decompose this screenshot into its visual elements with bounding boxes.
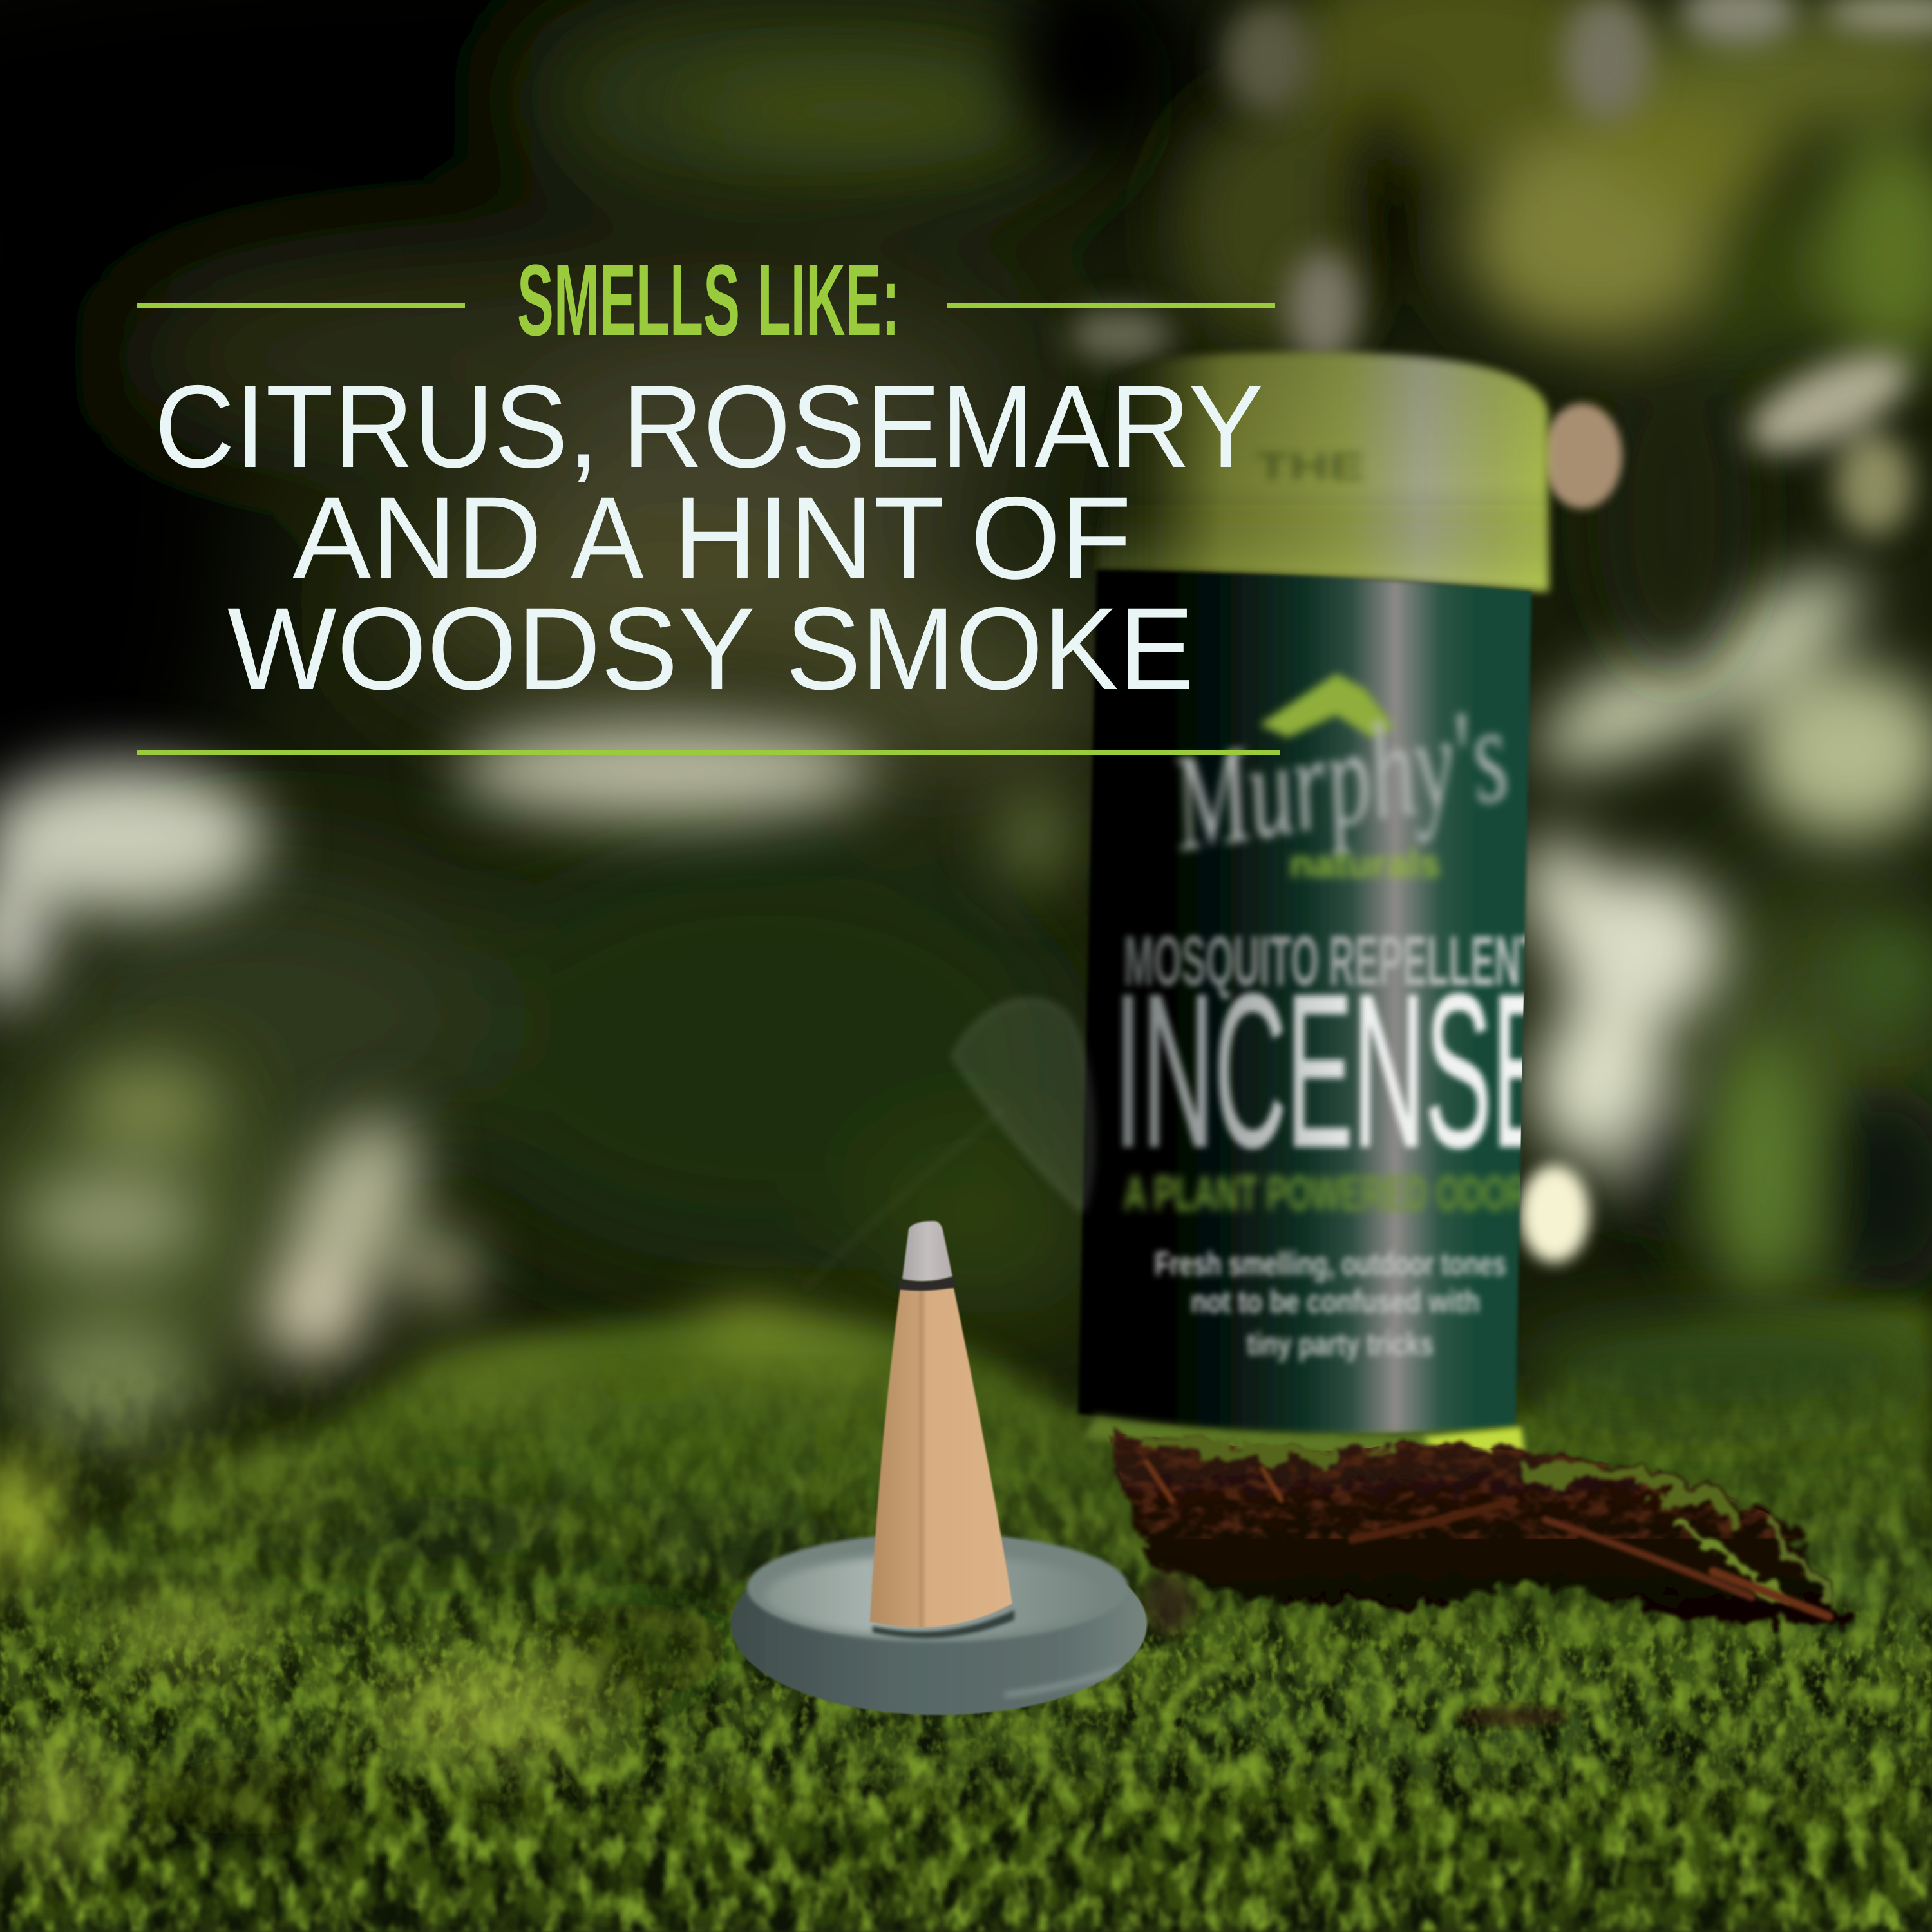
bark reddish strands bbox=[1146, 1462, 1829, 1616]
tin lid blurred text: THE bbox=[1256, 445, 1365, 488]
mosquito repellent line: MOSQUITO REPELLENT bbox=[1124, 922, 1542, 1001]
incense dish bbox=[731, 1533, 1147, 1715]
headline: AND bbox=[292, 472, 542, 603]
dish front highlight bbox=[1005, 1668, 1121, 1695]
smoke wisps bbox=[805, 999, 1093, 1288]
cone body bbox=[870, 1288, 1012, 1627]
headline: ROSEMARY bbox=[622, 361, 1264, 492]
cone ash tip bbox=[902, 1221, 952, 1281]
headline: WOODSY bbox=[227, 583, 755, 714]
bark moss fringe bbox=[1146, 1443, 1829, 1604]
tin label text bbox=[1114, 674, 1558, 1362]
dish rim bbox=[747, 1533, 1128, 1642]
headline: HINT bbox=[673, 472, 945, 603]
upper right foliage bokeh bbox=[1018, 0, 1932, 676]
brand mountain logo bbox=[1260, 674, 1394, 737]
loose bark crumbs bbox=[1144, 1573, 1193, 1634]
headline: SMOKE bbox=[786, 583, 1194, 714]
smells like text: LIKE: bbox=[757, 244, 900, 357]
headline: OF bbox=[971, 472, 1132, 603]
pale bokeh disc bbox=[1542, 403, 1622, 509]
cone shadow bbox=[873, 1610, 1014, 1638]
headline: CITRUS, bbox=[155, 361, 599, 492]
bottom rule bbox=[137, 750, 1280, 755]
incense tin bbox=[1078, 353, 1558, 1463]
headline: A bbox=[571, 472, 645, 603]
incense cone bbox=[870, 1221, 1014, 1638]
tin base glow bbox=[1082, 1416, 1525, 1463]
brand subline: naturals bbox=[1289, 842, 1441, 886]
lit moss highlights bbox=[0, 1468, 734, 1861]
tin lid bbox=[1097, 353, 1548, 591]
small bark pieces on moss bbox=[1459, 1707, 1568, 1725]
headline bbox=[155, 361, 1264, 714]
dish outer body bbox=[731, 1533, 1147, 1715]
brand script name: Murphy's bbox=[1161, 676, 1517, 880]
plant powered line: A PLANT POWERED ODOR bbox=[1124, 1166, 1530, 1221]
rule right bbox=[947, 303, 1275, 308]
bark body bbox=[1108, 1433, 1848, 1624]
bright bokeh spot bbox=[1520, 1165, 1589, 1263]
description lines: not to be confused with bbox=[1191, 1283, 1480, 1320]
description lines bbox=[1155, 1245, 1506, 1362]
description lines: Fresh smelling, outdoor tones bbox=[1155, 1245, 1506, 1283]
description lines: tiny party tricks bbox=[1247, 1326, 1434, 1362]
tin body bbox=[1078, 570, 1531, 1434]
bark with moss bbox=[1095, 1430, 1855, 1725]
dish well bbox=[765, 1555, 1103, 1637]
heading: smells like with rules bbox=[137, 244, 1275, 357]
smells like text: SMELLS bbox=[517, 244, 740, 357]
rule left bbox=[137, 303, 465, 308]
bark texture bbox=[1095, 1430, 1855, 1539]
cone burn band bbox=[898, 1276, 956, 1291]
moss ground bbox=[0, 1306, 1932, 1932]
